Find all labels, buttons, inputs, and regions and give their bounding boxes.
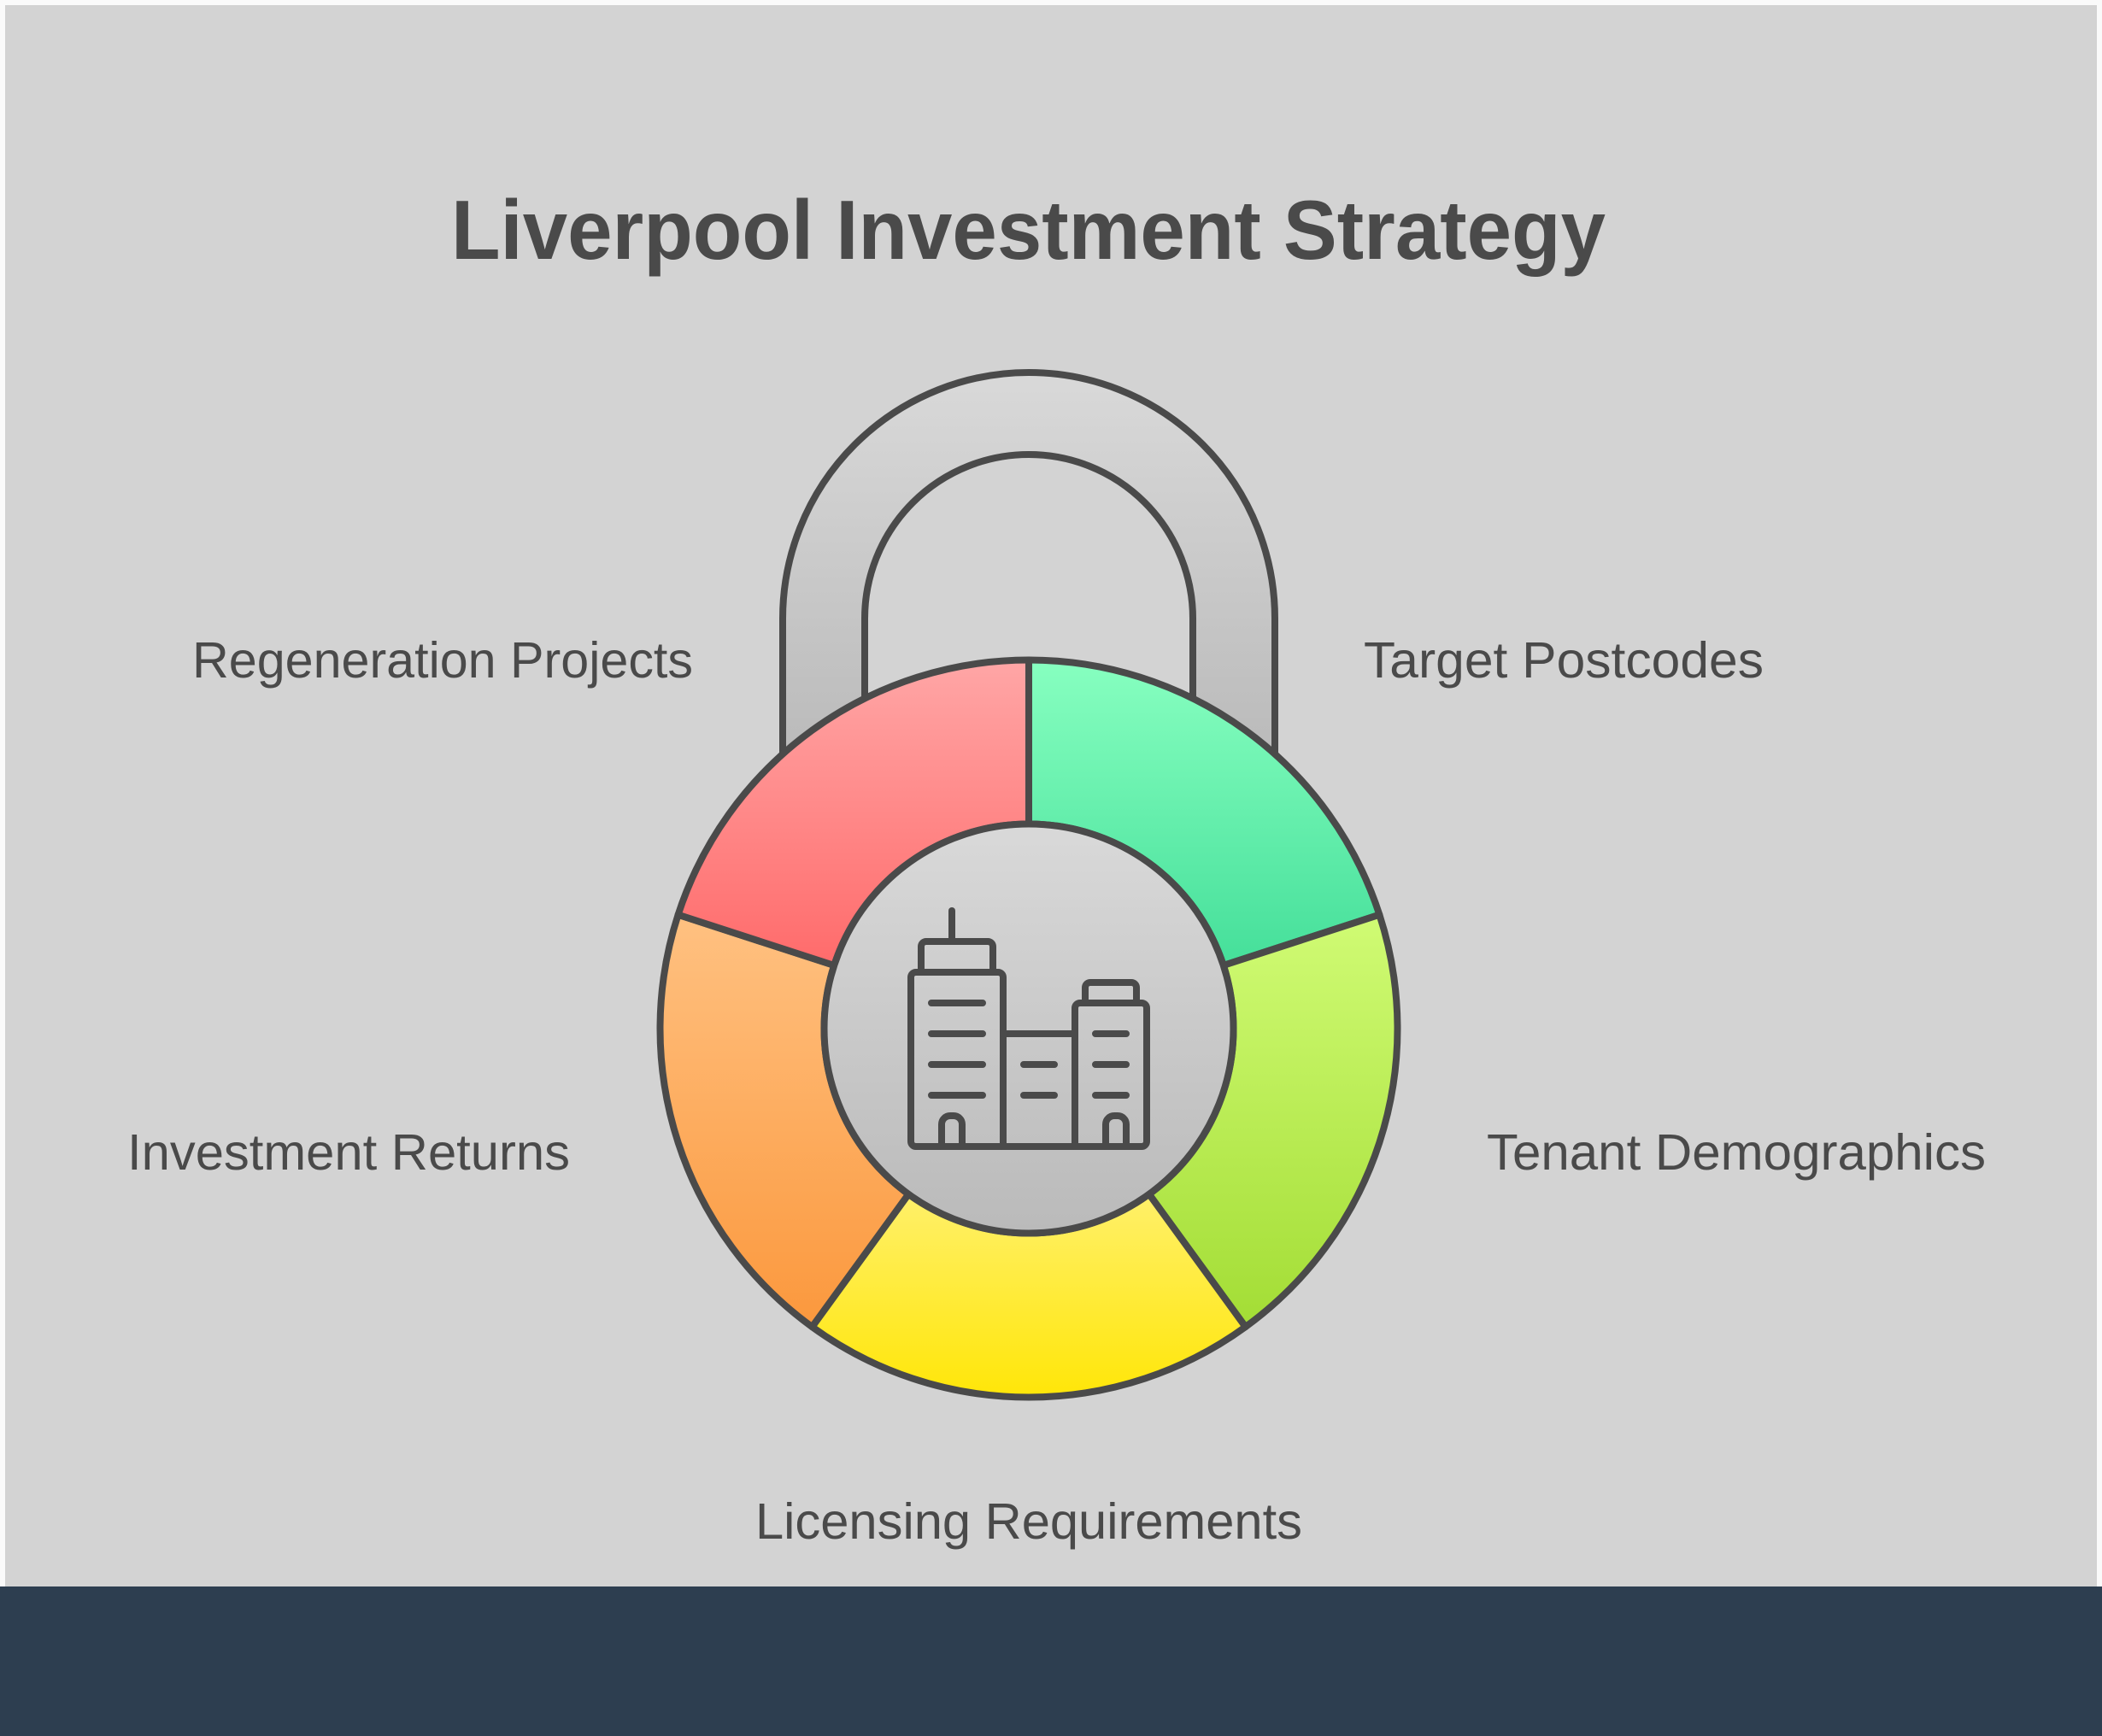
center hub circle: [824, 824, 1234, 1234]
icon: middle windows: [1024, 1064, 1054, 1095]
icon: tall tower windows: [931, 1003, 983, 1095]
icon: short tower body: [1075, 1003, 1147, 1147]
ring segment: Licensing Requirements: [812, 1194, 1246, 1397]
footer bar: [0, 1586, 2102, 1736]
icon: city buildings: [911, 911, 1147, 1147]
ring segment: Tenant Demographics: [1149, 915, 1398, 1327]
label: Investment Returns: Investment Returns: [127, 1124, 570, 1181]
icon: short tower top: [1085, 982, 1136, 1003]
ring segment: Regeneration Projects: [678, 660, 1029, 965]
icon: middle building: [1003, 1034, 1075, 1147]
icon: short tower windows: [1095, 1034, 1126, 1095]
icon: tall tower top: [921, 941, 993, 972]
title: Liverpool Investment Strategy: [451, 183, 1606, 277]
icon: tall tower door: [942, 1116, 962, 1147]
label: Licensing Requirements: Licensing Requirements: [755, 1493, 1302, 1550]
label: Tenant Demographics: Tenant Demographics: [1487, 1124, 1986, 1181]
padlock diagram: [660, 372, 1398, 1397]
icon: short tower door: [1106, 1116, 1126, 1147]
icon: antenna: [948, 911, 955, 941]
label: Target Postcodes: Target Postcodes: [1364, 632, 1764, 689]
label: Regeneration Projects: Regeneration Projects: [192, 632, 693, 689]
ring segment: Target Postcodes: [1029, 660, 1379, 965]
ring segment: Investment Returns: [660, 915, 908, 1327]
icon: tall tower body: [911, 972, 1003, 1147]
padlock shackle: [783, 372, 1275, 760]
